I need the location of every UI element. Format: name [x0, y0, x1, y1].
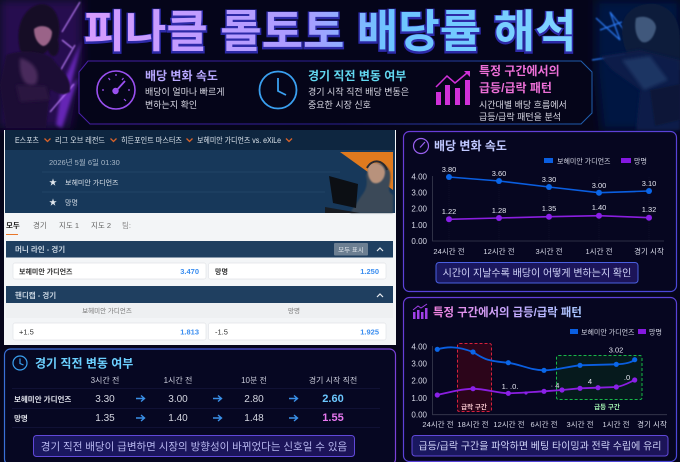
annotation: surge zone: 급등 구간	[594, 402, 620, 411]
text: surge and drop pattern: 급등/급락 패턴	[479, 81, 552, 95]
line chart: 4.00	[411, 172, 428, 182]
match info block: ★	[49, 198, 57, 207]
table: 2.60	[322, 393, 344, 405]
line chart	[411, 342, 667, 429]
breadcrumb bar: 히든포인트 마스터즈	[121, 135, 182, 145]
line chart: .0	[624, 373, 630, 382]
line chart: 1. .0.	[502, 382, 518, 391]
text: surge and drop pattern: 특정 구간에서의	[479, 64, 560, 78]
line chart: 3.10	[642, 179, 656, 188]
line chart: 3.02	[609, 346, 623, 354]
money line section: 머니 라인 - 경기	[15, 244, 65, 254]
text: pre-match movement: 중요한 시장 신호	[308, 100, 371, 110]
text: betting speed: 변하는지 확인	[145, 99, 197, 110]
table: 3.30	[95, 394, 115, 405]
legend	[570, 328, 662, 336]
table: 1.48	[244, 413, 264, 424]
legend: 망명	[634, 156, 647, 166]
line chart: 3.30	[542, 175, 556, 184]
tabs: 팀:	[122, 221, 131, 230]
title: 피나클 롤토토 배당률 해석	[84, 7, 576, 58]
line chart: 24시간 전	[433, 246, 465, 256]
text: surge and drop pattern: 시간대별 배당 흐름에서	[479, 100, 567, 110]
tabs	[6, 220, 131, 235]
line chart: 12시간 전	[493, 419, 525, 429]
text: betting speed	[145, 68, 225, 110]
breadcrumb bar: 리그 오브 레전드	[55, 135, 105, 145]
callout	[412, 436, 668, 456]
annotation: drop zone: 급락 구간	[461, 402, 487, 411]
legend	[544, 156, 647, 166]
line chart: 12시간 전	[483, 246, 515, 256]
match info block: 보헤미안 가디언즈	[65, 178, 119, 187]
text: betting speed: 배당 변화 속도	[145, 68, 218, 83]
line chart: 3.00	[411, 360, 428, 368]
line chart: 1.35	[542, 204, 556, 213]
handicap section: 망명	[288, 306, 300, 315]
handicap section: -1.5	[215, 328, 228, 336]
icon: bars small	[413, 304, 428, 319]
illustration: esports player	[325, 152, 393, 213]
money line section: 망명	[215, 267, 228, 276]
callout: 경기 직전 배당이 급변하면 시장의 방향성이 바뀌었다는 신호일 수 있음	[41, 440, 348, 453]
line chart: 3시간 전	[536, 246, 563, 256]
line chart: 1시간 전	[603, 419, 630, 429]
table: 2.80	[244, 394, 264, 405]
line chart: 경기 시작	[637, 419, 667, 429]
money line section	[6, 241, 393, 279]
callout	[436, 262, 638, 283]
handicap section	[6, 286, 393, 340]
table: 1시간 전	[164, 375, 192, 385]
line chart: 1.22	[442, 207, 456, 216]
money line section: 1.250	[360, 267, 379, 276]
table: 10분 전	[241, 375, 267, 385]
line chart: 0.00	[411, 237, 428, 246]
breadcrumb bar: 보헤미안 가디언즈 vs. eXiLe	[197, 135, 281, 145]
icon: clock small	[13, 356, 27, 370]
line chart: 1.32	[642, 205, 656, 214]
breadcrumb bar	[5, 130, 395, 150]
illustration: purple sorceress	[0, 0, 82, 128]
table: 1.35	[95, 413, 115, 424]
heading: 특정 구간에서의 급등/급락 패턴	[433, 305, 582, 319]
icon: clock	[260, 72, 296, 108]
icon: rising bars	[436, 71, 470, 105]
text: pre-match movement: 경기 시작 직전 배당 변동은	[308, 86, 409, 97]
tabs: 경기	[33, 220, 47, 230]
panel: betting speed chart	[404, 132, 676, 292]
heading: 경기 직전 변동 여부	[35, 356, 133, 370]
table: 1.55	[322, 412, 344, 424]
handicap section: +1.5	[19, 328, 34, 336]
handicap section: 1.925	[360, 328, 379, 336]
legend: 보헤미안 가디언즈	[581, 328, 635, 336]
match info block: ★	[49, 178, 57, 187]
tabs: 지도 1	[59, 221, 79, 230]
text: pre-match movement: 경기 직전 변동 여부	[308, 68, 406, 83]
table: 경기 시작 직전	[309, 375, 357, 385]
line chart: 1.00	[411, 394, 428, 403]
line chart: 3.00	[411, 188, 428, 198]
text: pre-match movement	[308, 68, 409, 110]
tabs: 모두	[6, 221, 20, 230]
line chart: 0.00	[411, 410, 428, 420]
illustration: blue warrior	[592, 0, 680, 130]
line chart: 1시간 전	[586, 246, 613, 256]
panel: surge and drop chart	[404, 298, 676, 462]
breadcrumb bar: E스포츠	[15, 136, 39, 145]
table: 3시간 전	[91, 375, 119, 385]
callout: 급등/급락 구간을 파악하면 베팅 타이밍과 전략 수립에 유리	[418, 440, 662, 452]
tabs: 지도 2	[91, 221, 111, 230]
annotation: drop zone	[458, 344, 492, 412]
line chart: 3.60	[492, 169, 506, 178]
match info block: 망명	[65, 198, 78, 207]
line chart: 1.40	[592, 203, 606, 212]
line chart: 18시간 전	[457, 419, 489, 429]
line chart: 1.00	[411, 221, 428, 230]
title: 피나클 롤토토 배당률 해석	[84, 6, 576, 57]
line chart: 3.80	[442, 165, 456, 174]
panel: match odds screenshot	[4, 130, 396, 345]
line chart	[411, 165, 664, 256]
line chart: 3.00	[592, 181, 606, 190]
text: surge and drop pattern: 급등/급락 패턴을 분석	[479, 111, 561, 122]
line chart: · 4	[551, 381, 559, 390]
match info block	[5, 150, 395, 213]
money line section: 모두 표시	[338, 246, 364, 254]
annotation: surge zone	[556, 356, 642, 411]
money line section: 보헤미안 가디언즈	[19, 267, 73, 276]
handicap section: 핸디캡 - 경기	[15, 290, 56, 300]
line chart: 4.00	[411, 342, 428, 352]
table	[12, 375, 380, 428]
heading: 배당 변화 속도	[434, 138, 507, 153]
table: 망명	[14, 413, 28, 423]
callout	[34, 436, 354, 456]
money line section: 3.470	[180, 267, 199, 276]
legend: 보헤미안 가디언즈	[557, 156, 611, 166]
match info block: 2026년 5월 6일 01:30	[49, 157, 120, 167]
handicap section: 보헤미안 가디언즈	[82, 306, 132, 315]
header info panel	[79, 61, 592, 124]
line chart: 경기 시작	[634, 246, 664, 256]
text: surge and drop pattern	[479, 64, 567, 122]
line chart: 1.28	[492, 206, 506, 215]
table: 1.40	[168, 413, 188, 424]
line chart: 2.00	[411, 376, 428, 386]
icon: speed gauge	[97, 71, 135, 109]
line chart: 24시간 전	[422, 419, 454, 429]
callout: 시간이 지날수록 배당이 어떻게 변하는지 확인	[443, 266, 631, 280]
handicap section: 1.813	[180, 328, 199, 336]
table: 보헤미안 가디언즈	[14, 394, 71, 404]
line chart: 6시간 전	[531, 419, 558, 429]
legend: 망명	[649, 328, 662, 336]
icon: gauge small	[414, 138, 428, 154]
line chart: 4	[588, 377, 592, 386]
panel: pre-match movement table	[4, 349, 396, 462]
line chart: 2.00	[411, 204, 428, 214]
line chart: 3시간 전	[567, 419, 594, 429]
table: 3.00	[168, 394, 188, 405]
text: betting speed: 배당이 얼마나 빠르게	[145, 87, 225, 97]
